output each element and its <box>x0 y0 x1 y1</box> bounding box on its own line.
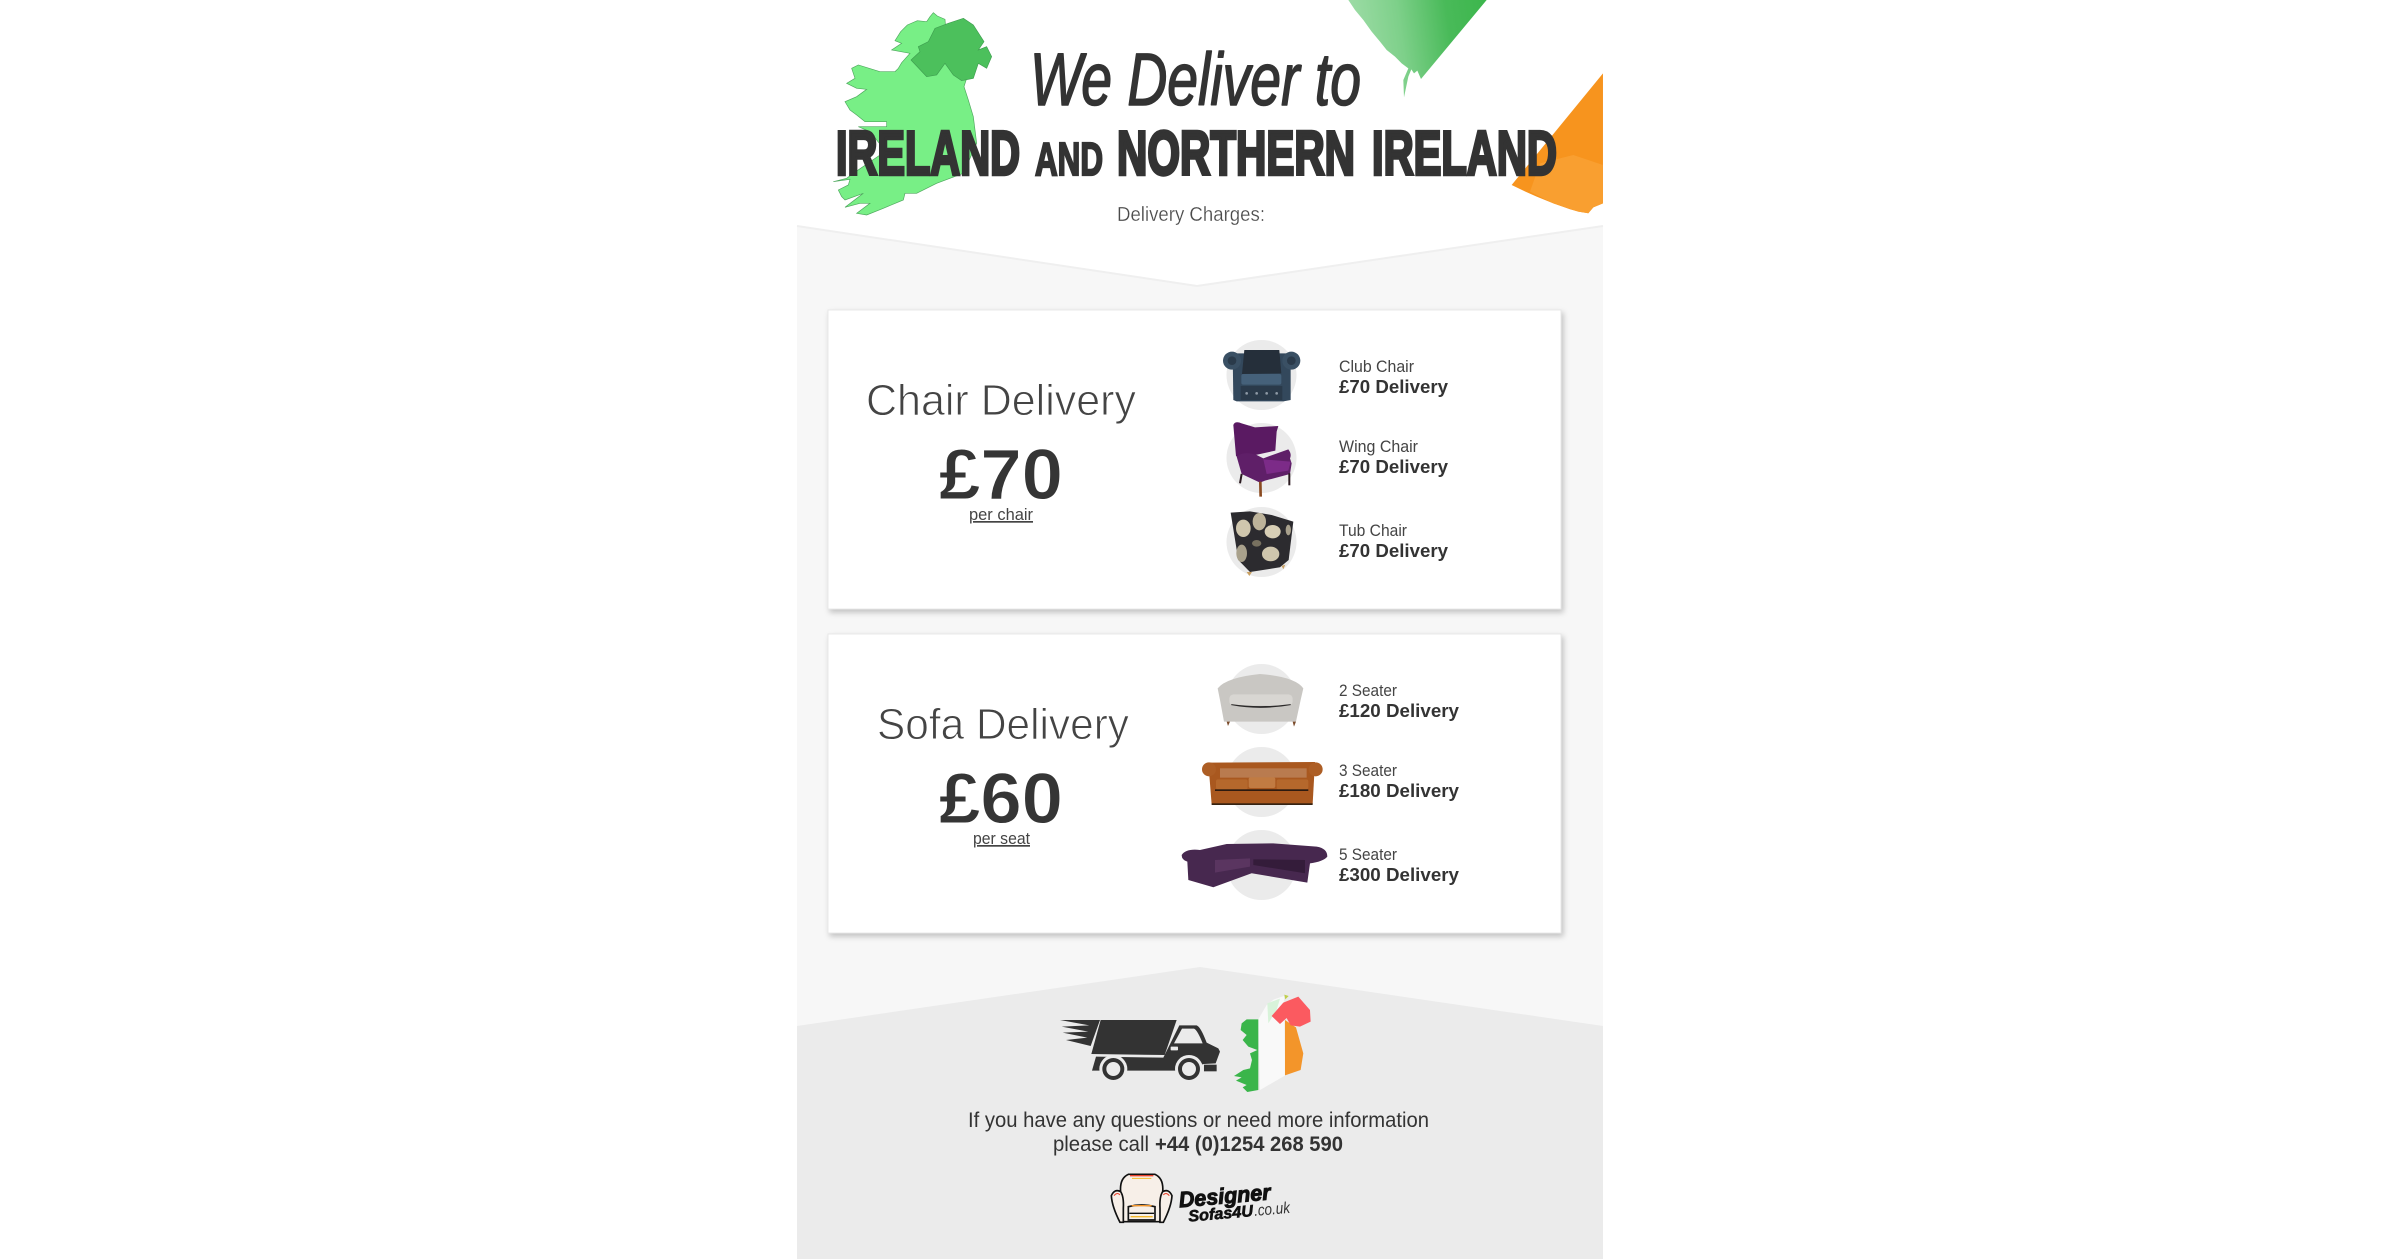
map of Ireland with Northern Ireland highlighted <box>833 13 992 215</box>
call line: please call <box>1053 1133 1149 1156</box>
orange paint brush stroke <box>1512 73 1603 213</box>
icon: tub chair <box>1231 511 1293 576</box>
label: tub chair <box>1339 521 1448 561</box>
label: 3 seater: £180 Delivery <box>1339 781 1459 801</box>
word: NORTHERN: NORTHERN <box>1117 120 1355 188</box>
label: 2 seater <box>1339 681 1459 721</box>
price: £60 per seat: £60 <box>939 760 1063 839</box>
word: AND: AND <box>1035 133 1103 185</box>
question line: If you have any questions or need more information <box>968 1109 1429 1132</box>
label: 2 seater: £120 Delivery <box>1339 701 1459 721</box>
logo: Designer Sofas4U <box>1111 1174 1292 1226</box>
circle behind 2 seater <box>1226 664 1296 734</box>
logo wordmark: Sofas4U <box>1188 1203 1254 1226</box>
Republic of Ireland shape <box>833 13 977 215</box>
icon: 3 seater sofa <box>1202 762 1323 805</box>
icon: 2 seater sofa <box>1218 674 1303 727</box>
label: 3 seater <box>1339 761 1459 801</box>
card background <box>828 310 1561 609</box>
icon: wing chair <box>1233 422 1292 497</box>
green paint brush stroke <box>1348 0 1487 97</box>
label: 2 seater: 2 Seater <box>1339 681 1397 700</box>
panel: sofa delivery <box>828 634 1561 933</box>
label: wing chair: Wing Chair <box>1339 437 1418 456</box>
heading: sofa delivery: Sofa Delivery <box>877 700 1129 749</box>
logo icon: armchair <box>1111 1174 1172 1222</box>
logo wordmark: .co.uk <box>1253 1200 1292 1220</box>
heading: chair delivery: Chair Delivery <box>866 376 1136 425</box>
title: Ireland and Northern Ireland <box>836 120 1557 188</box>
label: tub chair: £70 Delivery <box>1339 541 1448 561</box>
label: club chair <box>1339 357 1448 397</box>
label: wing chair <box>1339 437 1448 477</box>
label: 5 seater <box>1339 845 1459 885</box>
circle behind 5 seater <box>1226 830 1296 900</box>
label: tub chair: Tub Chair <box>1339 521 1407 540</box>
icon: Ireland map in flag colours <box>1234 995 1311 1092</box>
circle behind 3 seater <box>1226 747 1296 817</box>
phone number: +44 (0)1254 268 590 <box>1155 1133 1343 1156</box>
note: per seat: per seat <box>973 829 1030 848</box>
icon: delivery van <box>1060 1020 1220 1083</box>
logo wordmark <box>1178 1178 1292 1226</box>
circle behind tub chair <box>1226 507 1296 577</box>
icon: club chair <box>1223 350 1300 401</box>
card background <box>828 634 1561 933</box>
icon: 5 seater corner sofa <box>1182 843 1327 887</box>
label: club chair: Club Chair <box>1339 357 1414 376</box>
Northern Ireland shape <box>911 18 992 81</box>
label: club chair: £70 Delivery <box>1339 377 1448 397</box>
word: IRELAND: IRELAND <box>836 120 1020 188</box>
logo wordmark: Designer <box>1178 1179 1273 1212</box>
label: 5 seater: 5 Seater <box>1339 845 1397 864</box>
circle behind club chair <box>1226 340 1296 410</box>
note: per chair: per chair <box>969 505 1033 524</box>
footer message <box>968 1109 1429 1156</box>
label: 5 seater: £300 Delivery <box>1339 865 1459 885</box>
circle behind wing chair <box>1226 423 1296 493</box>
price: £70 per chair: £70 <box>939 436 1063 515</box>
subtitle: delivery charges: Delivery Charges: <box>1117 204 1265 226</box>
dark grey footer background <box>797 967 1603 1259</box>
title: script line: We Deliver to <box>1030 38 1361 121</box>
panel: chair delivery <box>828 310 1561 609</box>
label: 3 seater: 3 Seater <box>1339 761 1397 780</box>
light grey middle background band <box>797 226 1603 1030</box>
label: wing chair: £70 Delivery <box>1339 457 1448 477</box>
word: IRELAND second: IRELAND <box>1372 120 1557 188</box>
